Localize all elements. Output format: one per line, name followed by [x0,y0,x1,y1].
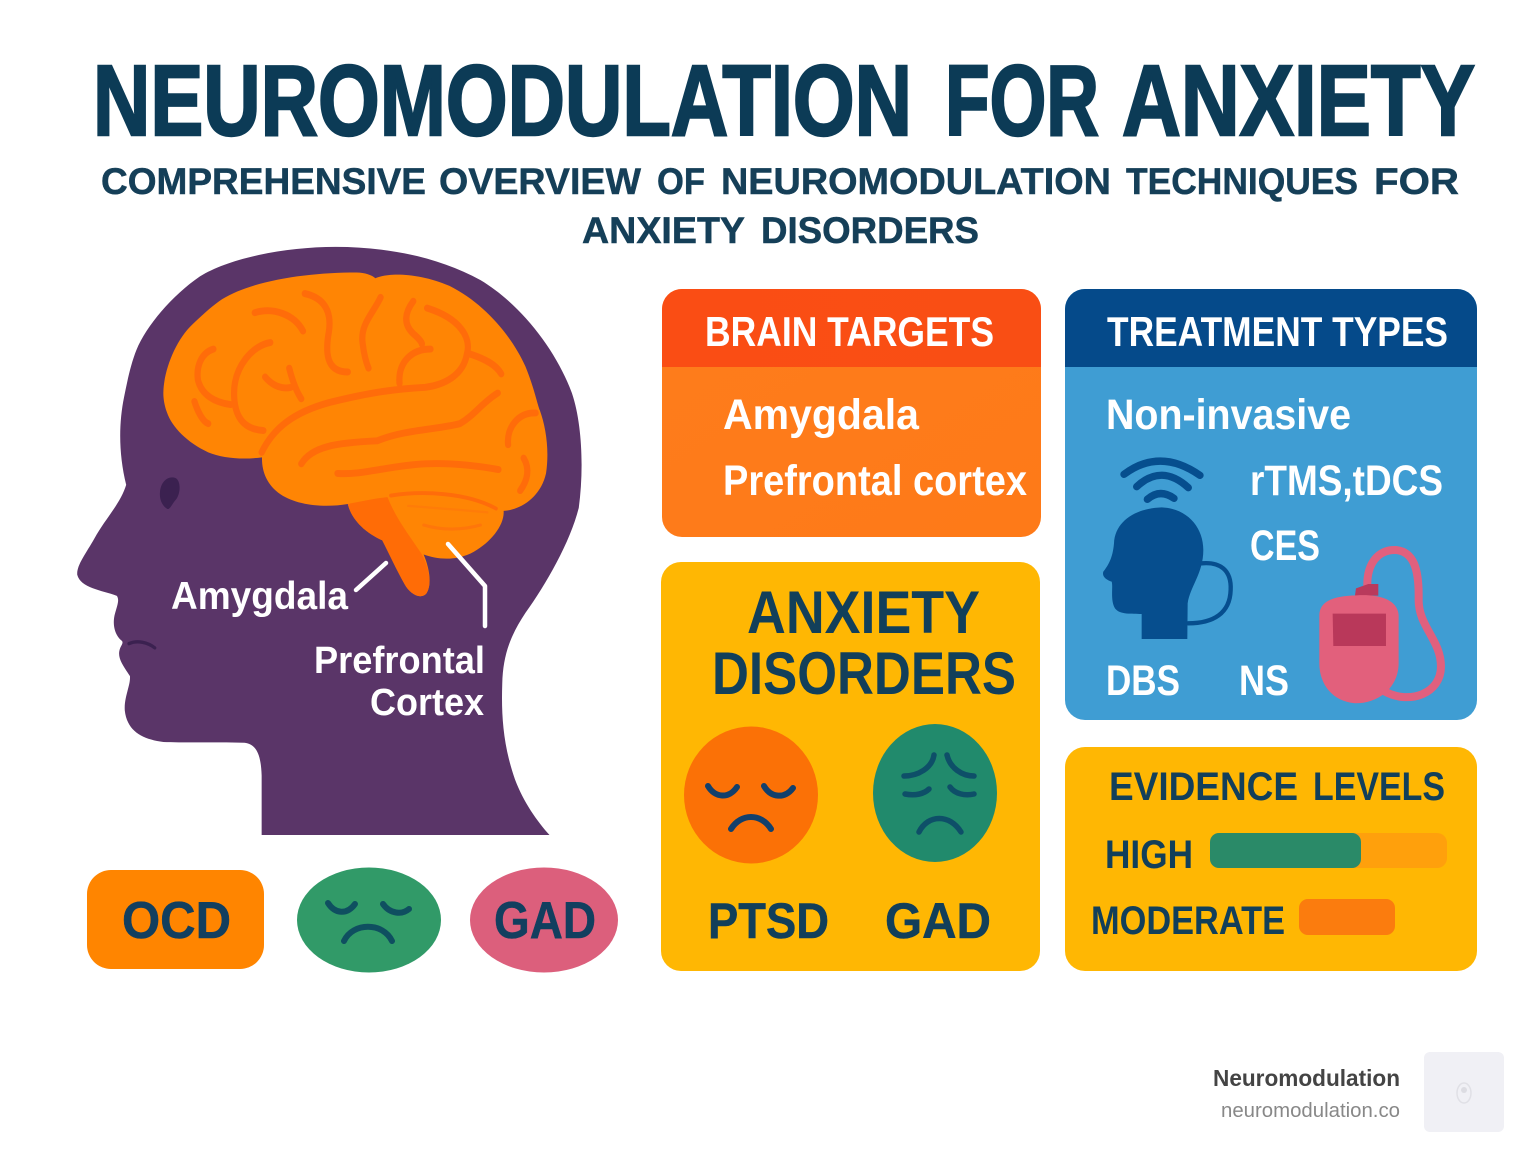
heading: BRAIN TARGETS [705,308,994,355]
target list: Prefrontal cortex [723,457,1027,505]
brain [163,273,547,596]
target list [723,391,1027,505]
bar: high [1210,833,1447,868]
heading [1109,765,1445,809]
badge: GAD [470,868,618,972]
subtitle: OF [657,161,705,202]
heading: DISORDERS [712,640,1016,707]
label: high: HIGH [1105,833,1193,877]
mouth [129,642,155,648]
icon: green worried face [873,724,997,862]
label: GAD: GAD [885,893,991,949]
panel: evidence levels [1065,747,1477,971]
footer brand [1213,1052,1504,1132]
panel header [1065,289,1477,367]
brand name: Neuromodulation [1213,1065,1400,1091]
label: prefrontal cortex: Cortex [370,682,484,724]
subtitle: TECHNIQUES [1126,161,1358,202]
panel header [662,289,1041,367]
title: FOR [945,45,1099,157]
label: rTMS, tDCS: rTMS,tDCS [1250,457,1443,505]
badge: OCD: OCD [122,892,231,950]
icon: pink stimulator device [1319,550,1441,703]
subtitle: ANXIETY [582,210,745,251]
label: DBS: DBS [1106,657,1180,705]
subtitle: OVERVIEW [439,161,641,202]
label: amygdala: Amygdala [171,575,348,618]
brain folds [194,294,536,529]
heading: ANXIETY [747,579,980,646]
label: PTSD: PTSD [708,893,829,949]
icon: head with stimulation waves [1103,461,1231,639]
heading: EVIDENCE [1109,765,1298,809]
head silhouette [77,247,582,835]
subtitle: COMPREHENSIVE [101,161,426,202]
icon: faint logo [1457,1083,1471,1103]
icon: orange sad face [684,726,818,864]
bar: moderate [1299,899,1395,935]
panel body [662,289,1041,537]
label: prefrontal cortex [314,640,485,724]
target list: Amygdala [723,391,920,439]
label: moderate: MODERATE [1091,899,1285,943]
subtitle: FOR [1374,161,1459,202]
subtitle: DISORDERS [761,210,979,251]
badge: OCD [87,870,264,969]
heading [712,579,1016,707]
heading: TREATMENT TYPES [1107,308,1448,355]
logo tile [1424,1052,1504,1132]
panel: brain targets [662,289,1041,537]
badge: sad green face [297,868,441,972]
leader line: amygdala [356,563,386,590]
heading: LEVELS [1313,765,1445,809]
label: prefrontal cortex: Prefrontal [314,640,485,682]
title: NEUROMODULATION [93,45,912,157]
subtitle [101,161,1459,251]
badge: GAD: GAD [494,892,596,950]
illustration: head profile with brain [77,247,582,835]
label: NS: NS [1239,657,1289,705]
leader line: prefrontal cortex [448,544,485,626]
panel body [1065,289,1477,720]
eye [160,477,180,509]
subtitle: NEUROMODULATION [721,161,1111,202]
brand url: neuromodulation.co [1221,1100,1400,1122]
panel: treatment types [1065,289,1477,720]
brain stem [348,497,429,596]
panel: anxiety disorders [661,562,1040,971]
label: non-invasive: Non-invasive [1106,391,1351,439]
label: CES: CES [1250,522,1320,570]
